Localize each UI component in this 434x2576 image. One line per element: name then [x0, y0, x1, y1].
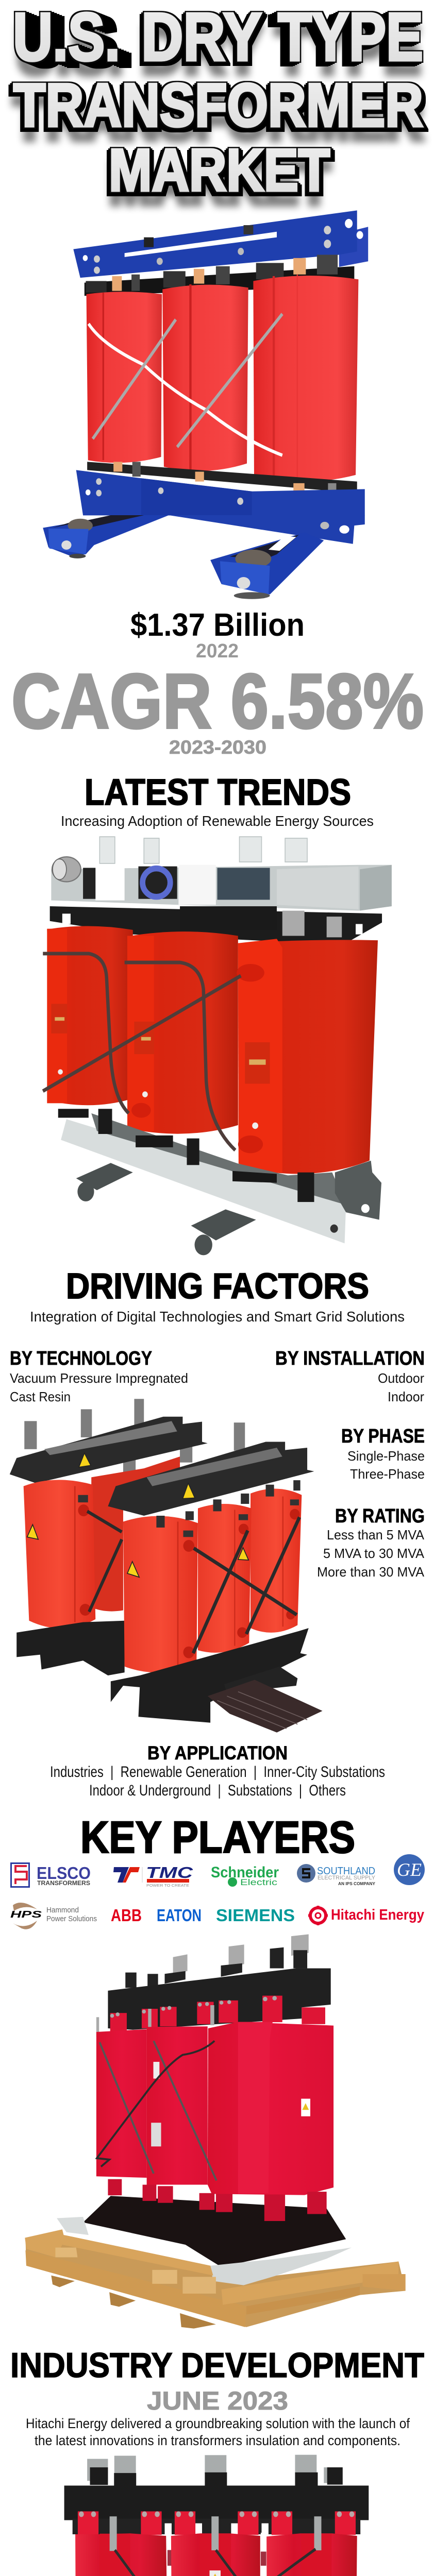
driving factors heading: [30, 1266, 405, 1325]
item: Three-Phase: [350, 1466, 425, 1482]
value: $1.37 Billion: [130, 607, 305, 643]
logo: Southland: [297, 1864, 376, 1886]
logo: GE: [394, 1854, 425, 1885]
logo: Eaton: EATON: [157, 1906, 202, 1925]
market value: [130, 607, 305, 662]
logo: ABB: ABB: [111, 1906, 142, 1925]
item: Vacuum Pressure Impregnated: [10, 1370, 188, 1386]
image: red transformer on wooden pallet, front view: [23, 2455, 412, 2576]
item: Single-Phase: [347, 1448, 425, 1464]
title line 3: MARKET: [109, 137, 330, 204]
industry development heading: [10, 2346, 424, 2448]
logo: Schneider Electric: Electric: [240, 1877, 278, 1887]
logo: Southland: ELECTRICAL SUPPLY: [318, 1875, 376, 1881]
segment: by phase: [341, 1426, 425, 1482]
application list line 2: Indoor & Underground | Substations | Others: [89, 1782, 346, 1799]
image: twin red and black transformers: [10, 1399, 323, 1733]
logo: TMC: [113, 1863, 193, 1888]
item: Indoor: [388, 1389, 424, 1404]
item: 5 MVA to 30 MVA: [323, 1546, 425, 1561]
logo: Hammond Power Solutions: Hammond: [46, 1906, 79, 1914]
trend text: Increasing Adoption of Renewable Energy Sources: [61, 813, 374, 829]
base year: 2022: [196, 640, 239, 662]
logo: Elsco: TRANSFORMERS: [37, 1879, 90, 1887]
heading: DRIVING FACTORS: [66, 1266, 369, 1306]
logo: Schneider Electric: Schneider: [211, 1864, 279, 1881]
segment: by technology: [10, 1348, 188, 1404]
segment heading: BY TECHNOLOGY: [10, 1348, 152, 1369]
image: blue and red dry type transformer: [43, 210, 368, 599]
segment heading: BY APPLICATION: [147, 1742, 288, 1764]
logo: Elsco: ELSCO: [37, 1863, 91, 1883]
title line 1: U.S.: U.S.: [13, 0, 120, 75]
item: More than 30 MVA: [317, 1564, 425, 1580]
item: Outdoor: [378, 1370, 424, 1386]
logo: Elsco: [11, 1863, 91, 1887]
logo: Hitachi Energy: [308, 1906, 424, 1925]
logo: Schneider Electric: [211, 1864, 279, 1887]
key player logos: [10, 1854, 425, 1929]
forecast period: 2023-2030: [169, 737, 266, 758]
logo: Southland: SOUTHLAND: [317, 1866, 375, 1877]
logo: Hammond Power Solutions: [10, 1903, 97, 1929]
logo: GE: GE: [397, 1859, 422, 1880]
item: Less than 5 MVA: [327, 1527, 425, 1543]
CAGR: [11, 657, 424, 758]
title: [13, 0, 423, 204]
logo: Siemens: SIEMENS: [216, 1906, 295, 1925]
item: Cast Resin: [10, 1389, 71, 1404]
driver text: Integration of Digital Technologies and Smart Grid Solutions: [30, 1309, 405, 1325]
logo: Hammond Power Solutions: Power Solutions: [46, 1914, 97, 1923]
title line 1: DRY: DRY: [141, 0, 262, 75]
segment: by installation: [275, 1348, 425, 1404]
date: JUNE 2023: [147, 2386, 288, 2415]
key players heading: KEY PLAYERS: [80, 1812, 355, 1862]
image: red transformer on wooden pallet, three quarter view: [25, 1934, 406, 2329]
logo: Hitachi Energy: Hitachi Energy: [331, 1907, 424, 1923]
logo: TMC: TMC: [146, 1863, 193, 1882]
logo: TMC: POWER TO CREATE: [146, 1884, 189, 1888]
image: silver framed red transformer: [43, 837, 392, 1255]
logo: Southland: AN IPS COMPANY: [338, 1882, 376, 1886]
description line 2: the latest innovations in transformers insulation and components.: [35, 2433, 400, 2448]
heading: LATEST TRENDS: [85, 772, 351, 813]
segment: by application: [50, 1742, 385, 1799]
latest trends heading: [61, 772, 374, 829]
segment: by rating: [317, 1505, 425, 1580]
logo: Hammond Power Solutions: HPS: [10, 1909, 42, 1920]
